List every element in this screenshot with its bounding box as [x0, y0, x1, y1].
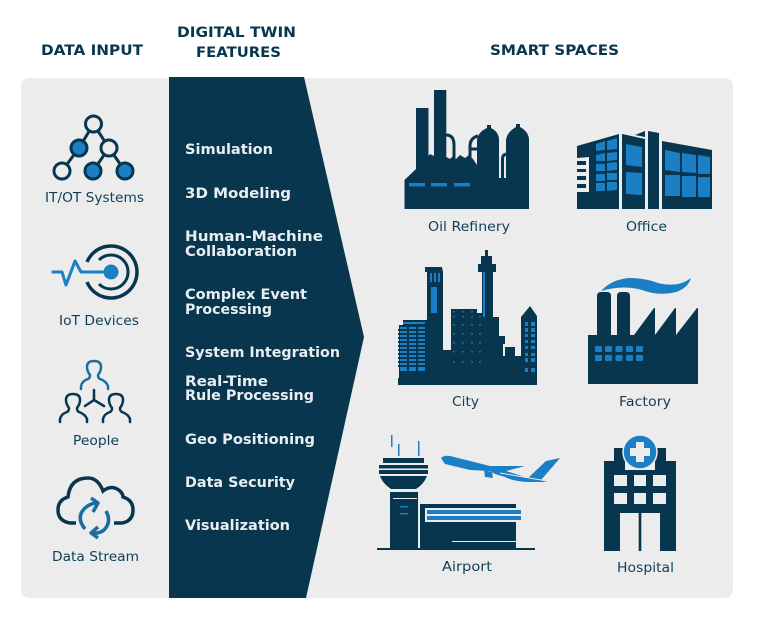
- feature list: Processing: [185, 302, 272, 318]
- heading: smart spaces: SMART SPACES: [490, 43, 619, 59]
- label: city: City: [452, 395, 479, 410]
- icon: airport: [377, 435, 560, 550]
- feature list: Collaboration: [185, 244, 297, 260]
- icon: people: [60, 361, 130, 422]
- feature list: Data Security: [185, 475, 295, 491]
- feature list: Visualization: [185, 518, 290, 534]
- heading: digital twin features: DIGITAL TWIN: [177, 25, 296, 41]
- feature list: Real-Time: [185, 374, 268, 390]
- feature list: Geo Positioning: [185, 432, 315, 448]
- heading: digital twin features: [177, 25, 296, 61]
- icon: IoT devices: [53, 246, 137, 298]
- icon: IT/OT systems: [54, 116, 133, 179]
- label: IoT devices: IoT Devices: [59, 314, 139, 329]
- feature list: [185, 142, 340, 534]
- icon: office: [577, 131, 712, 209]
- icon: oil refinery: [404, 90, 529, 209]
- label: data stream: Data Stream: [52, 550, 139, 565]
- feature list: Simulation: [185, 142, 273, 158]
- feature list: Human-Machine: [185, 229, 323, 245]
- label: factory: Factory: [619, 395, 671, 410]
- feature list: System Integration: [185, 345, 340, 361]
- label: IT/OT systems: IT/OT Systems: [45, 191, 144, 206]
- label: oil refinery: Oil Refinery: [428, 220, 510, 235]
- icon: city: [398, 250, 537, 385]
- feature list: 3D Modeling: [185, 186, 291, 202]
- label: people: People: [73, 434, 119, 449]
- feature list: Complex Event: [185, 287, 307, 303]
- label: airport: Airport: [442, 560, 492, 575]
- heading: digital twin features: FEATURES: [196, 45, 281, 61]
- panel: digital twin features arrow: [169, 77, 364, 598]
- icon: factory: [588, 278, 698, 384]
- label: hospital: Hospital: [617, 561, 674, 576]
- label: office: Office: [626, 220, 667, 235]
- icon: hospital: [604, 435, 676, 551]
- heading: data input: DATA INPUT: [41, 43, 143, 59]
- icon: data stream: [58, 478, 133, 538]
- panel: background: [21, 78, 733, 598]
- feature list: Rule Processing: [185, 388, 314, 404]
